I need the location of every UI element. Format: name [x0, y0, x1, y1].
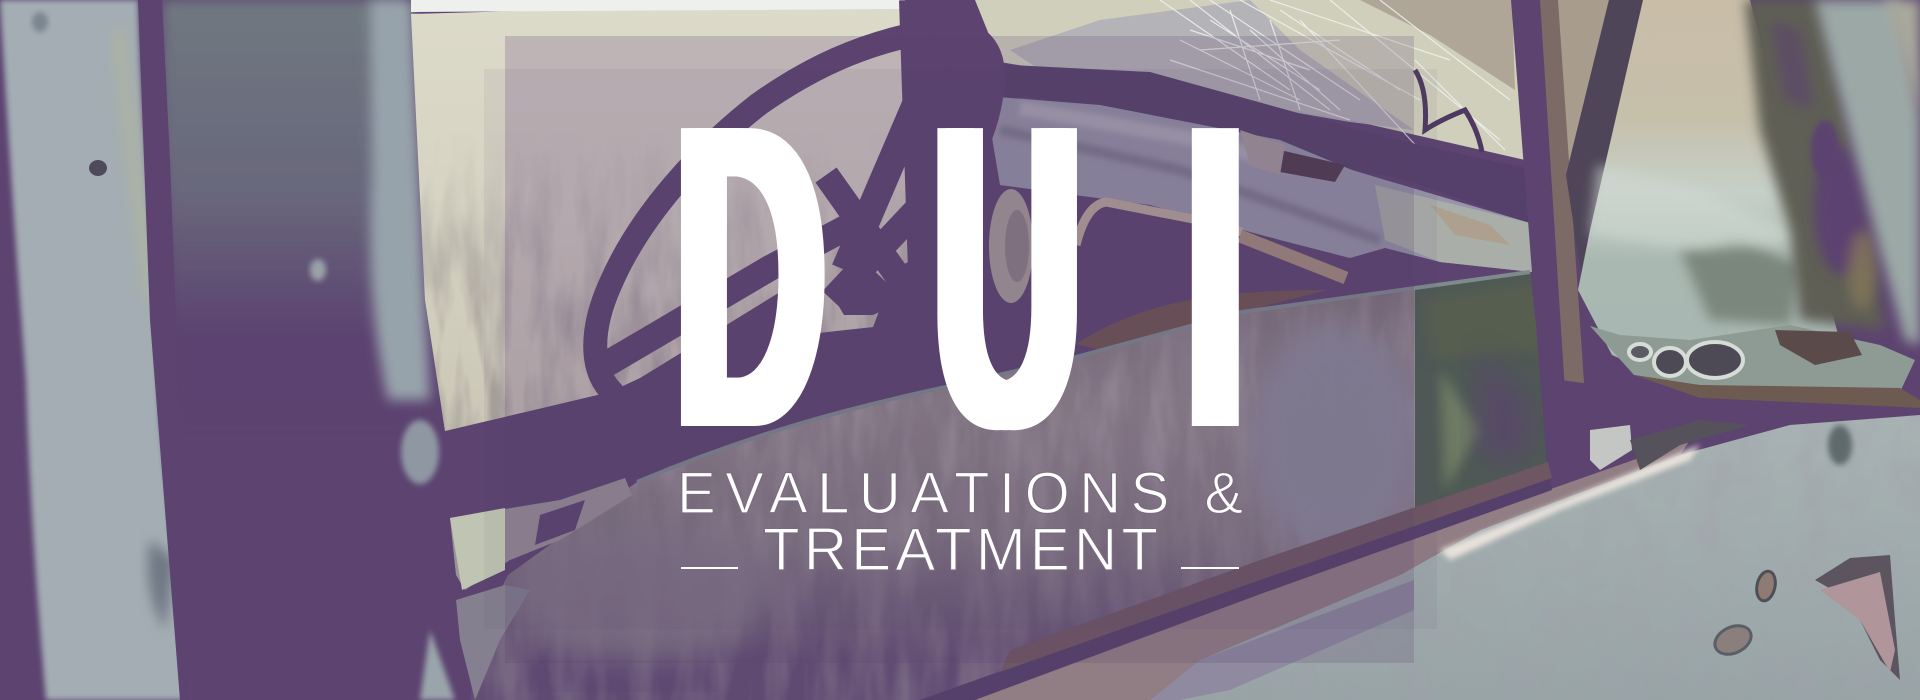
- door damage: rust holes: [1710, 555, 1900, 680]
- dashboard handle: [1076, 202, 1346, 278]
- title: DUI: D: [675, 34, 825, 518]
- door panel: [1150, 415, 1920, 700]
- windshield with cracks: [952, 0, 1525, 160]
- gauge: [989, 189, 1033, 303]
- vent window: [1578, 0, 1920, 408]
- windshield pillar gap: [1557, 0, 1609, 175]
- rusted door frame: [1745, 0, 1920, 345]
- subtitle: evaluations and treatment: TREATMENT: [763, 516, 1158, 583]
- subtitle: evaluations and treatment: EVALUATIONS &: [677, 461, 1243, 526]
- chrome trim scrap on the left: [450, 478, 632, 700]
- translucent overlay rectangle back: [484, 69, 1437, 629]
- left pillar: pale streak: [0, 0, 186, 700]
- title: DUI: I: [1170, 34, 1261, 518]
- steering wheel: [595, 0, 993, 392]
- dashboard trim: [992, 64, 1535, 225]
- title: DUI: U: [933, 34, 1082, 518]
- debris under frame: [1590, 420, 1750, 470]
- windshield pillars: [1511, 0, 1643, 480]
- left pillar: dark grey panel fading into purple: [138, 0, 455, 700]
- dashboard: [985, 96, 1532, 272]
- title: DUI: [675, 34, 1261, 518]
- side window: field behind car: [411, 0, 908, 431]
- door glass: [470, 270, 1560, 700]
- door sill rust band: [920, 440, 1700, 700]
- lower frame band: [1560, 380, 1920, 490]
- translucent overlay rectangle front: [505, 36, 1414, 663]
- translucent overlay rectangle lower: [529, 660, 719, 692]
